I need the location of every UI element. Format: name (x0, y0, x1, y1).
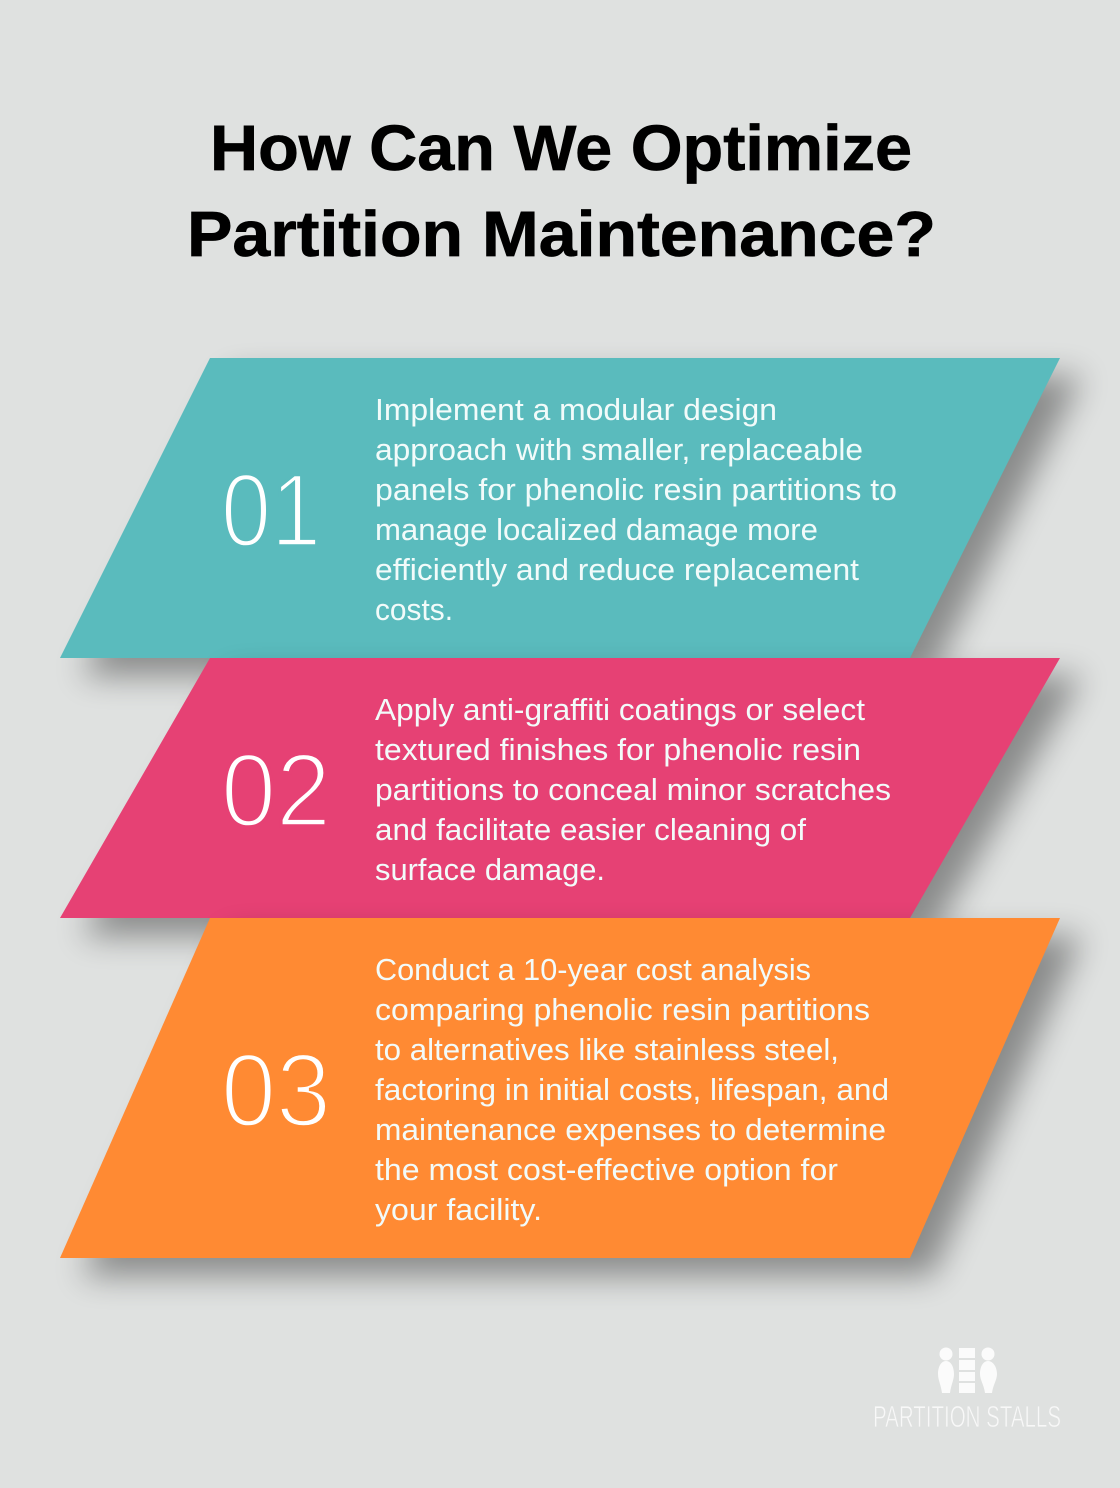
text block: step 02: partitions to conceal minor scratches (375, 772, 891, 807)
panel shape: pink parallelogram (60, 658, 1060, 918)
text block: step 01: approach with smaller, replaceable (375, 432, 863, 467)
panel shape: teal parallelogram (60, 358, 1060, 658)
number 01: 01 (221, 453, 321, 569)
panel: step 03 (60, 918, 1082, 1276)
text block: step 02: surface damage. (375, 852, 605, 887)
text block: step 01: efficiently and reduce replacement (375, 552, 859, 587)
text block: step 01: panels for phenolic resin partitions to (375, 472, 897, 507)
text block: step 02 (375, 692, 891, 887)
text block: step 01 (375, 392, 897, 627)
title (187, 112, 936, 270)
text block: step 03: the most cost-effective option for (375, 1152, 838, 1187)
icon: two people and partition (938, 1348, 997, 1393)
text block: step 03: factoring in initial costs, lifespan, and (375, 1072, 889, 1107)
number 03: 03 (221, 1033, 331, 1149)
logo: Partition Stalls (873, 1348, 1061, 1434)
text block: step 01: Implement a modular design (375, 392, 777, 427)
text block: step 01: costs. (375, 592, 453, 627)
title: How Can We Optimize (210, 112, 912, 184)
panel: step 02 (60, 658, 1082, 936)
title: Partition Maintenance? (187, 198, 936, 270)
panel shape: orange parallelogram (60, 918, 1060, 1258)
text block: step 03: Conduct a 10-year cost analysis (375, 952, 811, 987)
text block: step 02: textured finishes for phenolic resin (375, 732, 861, 767)
text block: step 03: maintenance expenses to determine (375, 1112, 886, 1147)
text block: step 02: and facilitate easier cleaning of (375, 812, 806, 847)
text block: step 03: to alternatives like stainless steel, (375, 1032, 839, 1067)
text block: step 03: comparing phenolic resin partitions (375, 992, 870, 1027)
number 02: 02 (221, 733, 331, 849)
text block: step 03 (375, 952, 889, 1227)
panel: step 01 (60, 358, 1082, 676)
text block: step 02: Apply anti-graffiti coatings or select (375, 692, 865, 727)
text block: step 03: your facility. (375, 1192, 542, 1227)
text block: step 01: manage localized damage more (375, 512, 818, 547)
